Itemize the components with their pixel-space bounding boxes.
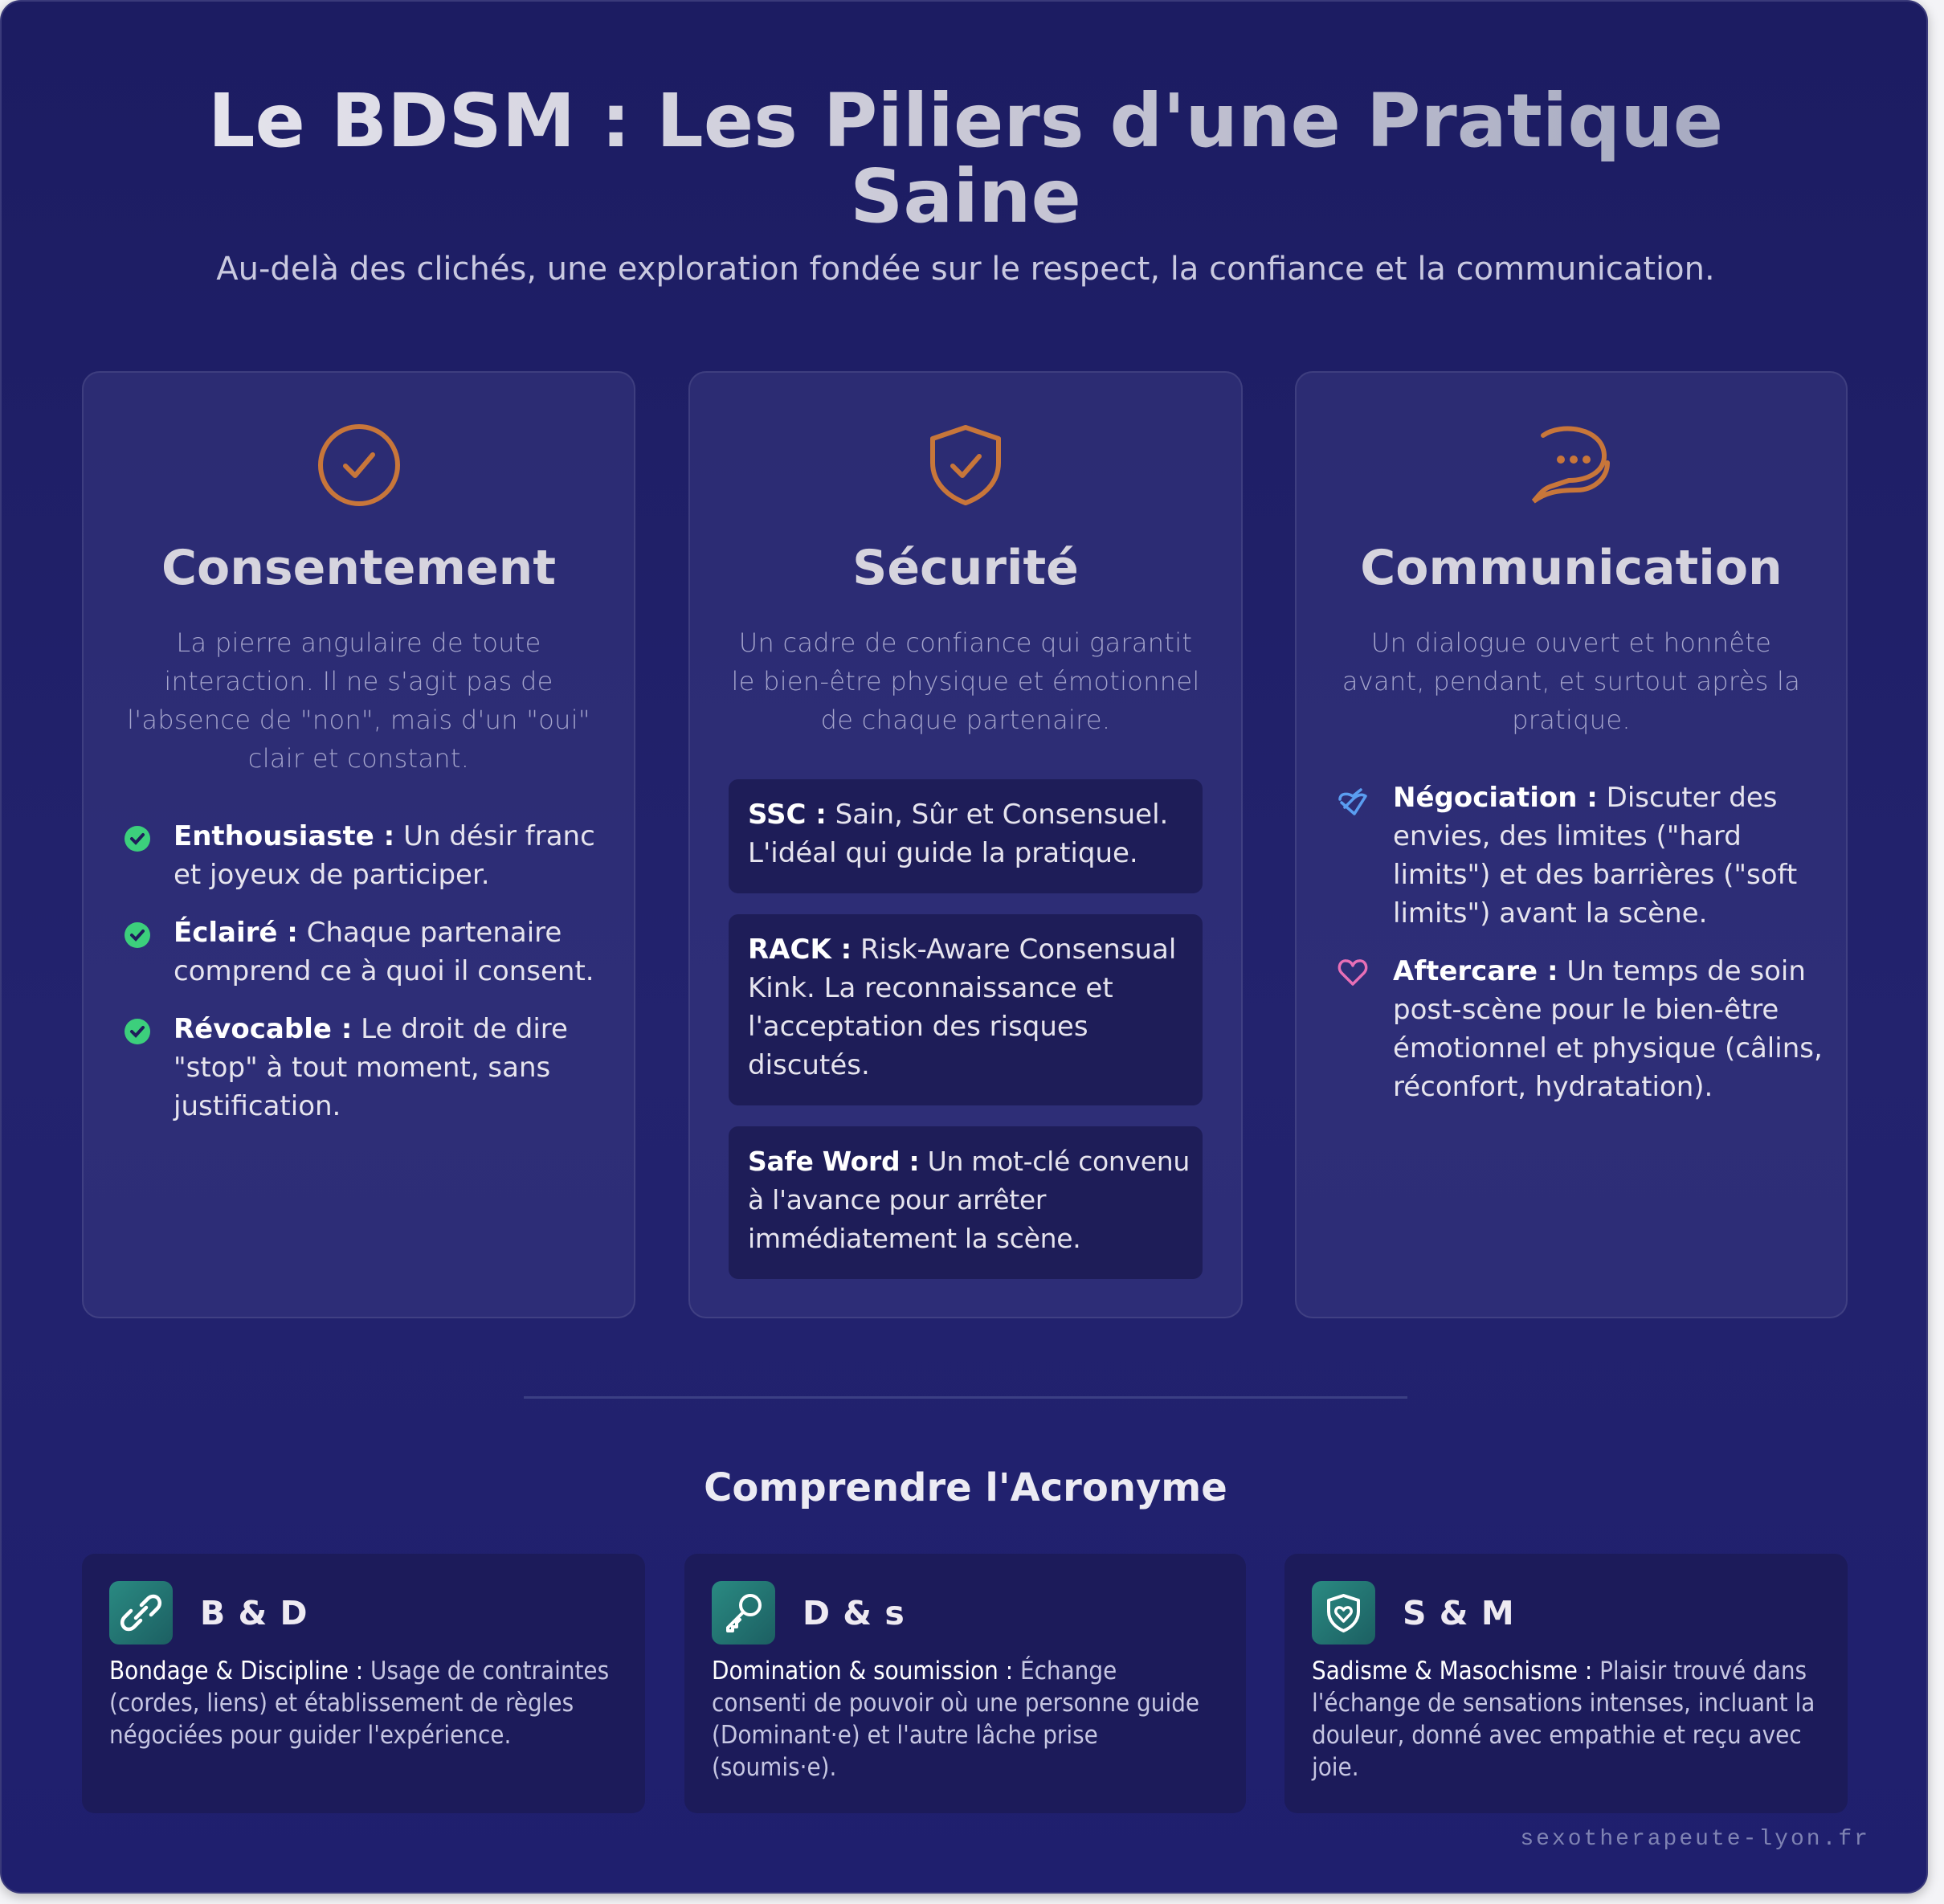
box: SSC <box>729 779 1203 893</box>
heading: securite: Sécurité <box>852 540 1079 596</box>
description: La pierre angulaire de toute interaction. Il ne s'agit pas de l'absence de "non", mais d'un "oui" clair et constant. <box>127 627 590 774</box>
list item: negociation: Négociation : Discuter des envies, des limites ("hard limits") et des barrières ("soft limits") avant la scène. <box>1393 782 1797 930</box>
heading: B & D <box>200 1594 308 1632</box>
icon: key <box>712 1581 775 1645</box>
card: S & M <box>1284 1554 1848 1813</box>
box: safe word: Safe Word : Un mot-clé convenu <box>748 1146 1190 1177</box>
card: D & s <box>684 1554 1246 1813</box>
box: RACK <box>729 914 1203 1105</box>
heading: comprendre l'acronyme: Comprendre l'Acronyme <box>704 1465 1227 1510</box>
list item: eclaire: Éclairé : Chaque partenaire comprend ce à quoi il consent. <box>174 917 594 987</box>
box: SSC: SSC : Sain, Sûr et Consensuel. L'idéal qui guide la pratique. <box>748 799 1168 869</box>
icon: shield <box>930 425 1001 505</box>
heading: D & s <box>803 1594 905 1632</box>
card: B & D <box>82 1554 645 1813</box>
description: Un cadre de confiance qui garantit <box>739 627 1192 658</box>
list item: aftercare: Aftercare : Un temps de soin post-scène pour le bien-être émotionnel et physique (câlins, réconfort, hydratation). <box>1393 955 1823 1103</box>
text: Sadisme & Masochisme : Plaisir trouvé dans l'échange de sensations intenses, incluant la douleur, donné avec empathie et reçu avec joie. <box>1312 1657 1815 1782</box>
title: Saine <box>850 153 1081 239</box>
text: Bondage & Discipline : Usage de contraintes (cordes, liens) et établissement de règles négociées pour guider l'expérience. <box>109 1657 609 1750</box>
description: de chaque partenaire. <box>821 705 1110 735</box>
box: RACK: RACK : Risk-Aware Consensual Kink. La reconnaissance et l'acceptation des risques discutés. <box>748 934 1176 1081</box>
description: le bien-être physique et émotionnel <box>731 666 1200 697</box>
title <box>2 84 1930 235</box>
title: Le BDSM : Les Piliers d'une Pratique <box>208 78 1723 164</box>
heading: communication: Communication <box>1360 540 1783 596</box>
icon: speech bubble <box>1531 426 1610 503</box>
panel: consentement <box>82 371 635 1318</box>
panel: securite <box>688 371 1243 1318</box>
description: Un dialogue ouvert et honnête avant, pendant, et surtout après la pratique. <box>1342 627 1800 735</box>
footer: website: sexotherapeute-lyon.fr <box>1520 1827 1870 1852</box>
description <box>731 627 1200 735</box>
box: safe word <box>729 1126 1203 1279</box>
list item: revocable: Révocable : Le droit de dire "stop" à tout moment, sans justification. <box>174 1013 568 1122</box>
box: safe word: à l'avance pour arrêter <box>748 1184 1046 1216</box>
box: safe word: immédiatement la scène. <box>748 1223 1080 1254</box>
list item: enthousiaste: Enthousiaste : Un désir franc et joyeux de participer. <box>174 820 595 891</box>
subtitle: Au-delà des clichés, une exploration fondée sur le respect, la confiance et la communication. <box>216 251 1715 288</box>
icon: heart shield <box>1312 1581 1375 1645</box>
heading: consentement: Consentement <box>161 540 556 596</box>
text: Domination & soumission : Échange consenti de pouvoir où une personne guide (Dominant·e) et l'autre lâche prise (soumis·e). <box>712 1657 1199 1782</box>
icon: check circle <box>318 424 400 506</box>
icon: chain link <box>109 1581 173 1645</box>
panel: communication <box>1295 371 1848 1318</box>
heading: S & M <box>1403 1594 1515 1632</box>
